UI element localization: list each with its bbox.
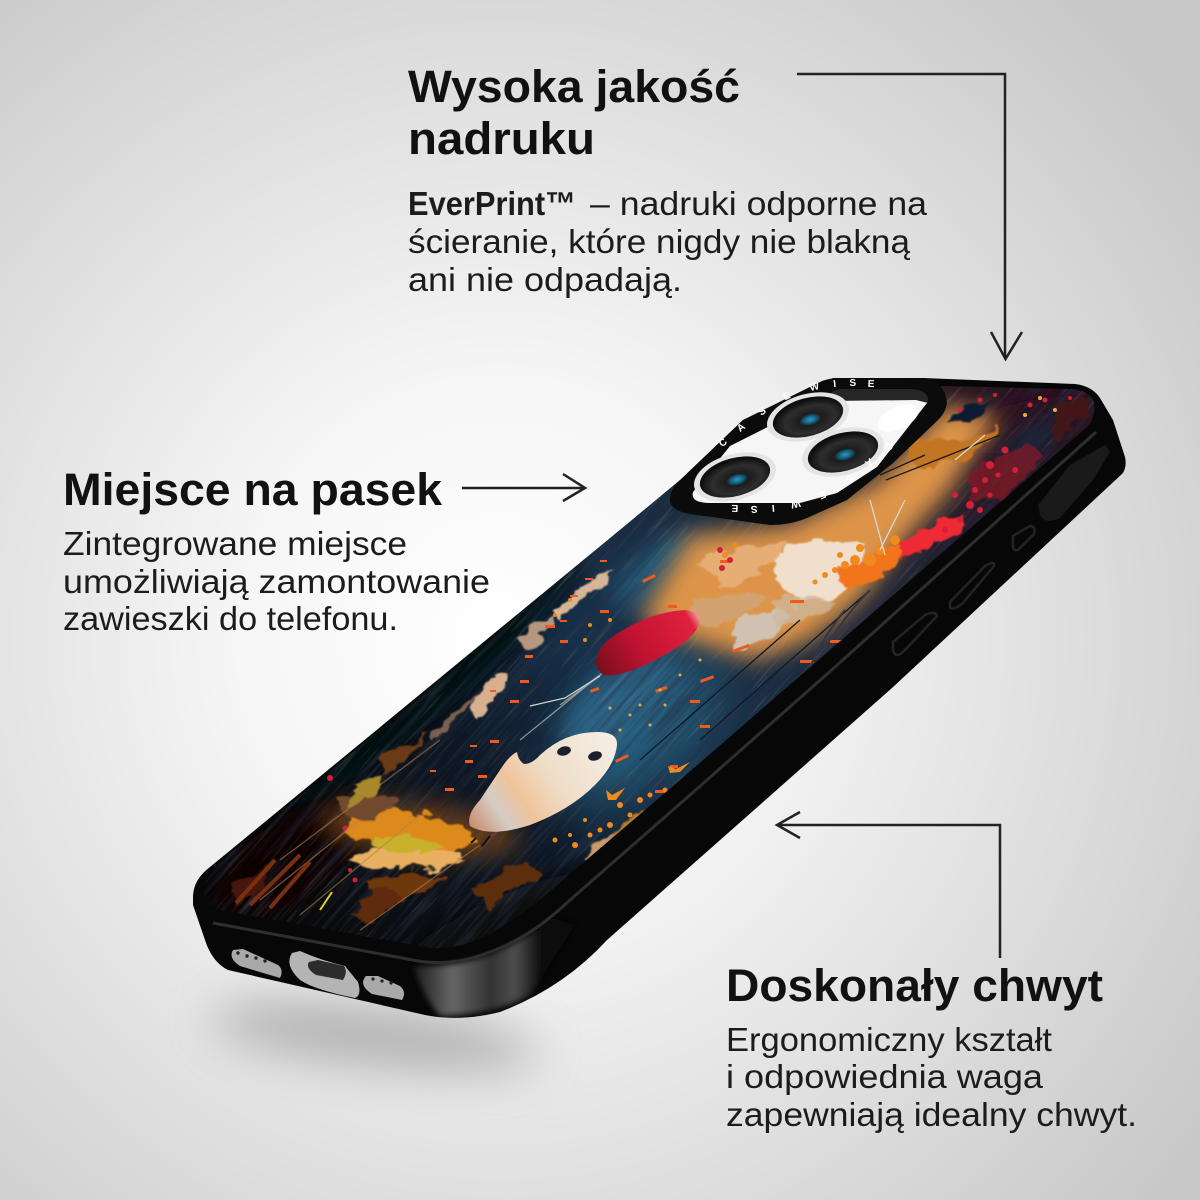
body text: EverPrint™ — [408, 185, 576, 222]
artwork brush strokes — [226, 400, 1085, 925]
bezel logo text: I — [771, 502, 775, 513]
button: action — [1013, 526, 1034, 550]
arrow — [777, 812, 1000, 958]
painted back artwork — [204, 386, 1094, 948]
body text — [726, 1021, 1137, 1133]
lens middle — [796, 419, 890, 485]
body text: i odpowiednia waga — [726, 1058, 1044, 1095]
ghost — [469, 732, 617, 846]
bezel logo text: W — [809, 381, 821, 394]
plate highlight — [873, 399, 923, 437]
heading: Miejsce na pasek — [63, 464, 443, 515]
camera plate — [693, 390, 927, 503]
artwork paint splatter — [430, 560, 842, 793]
charging port — [289, 951, 359, 998]
body text: zawieszki do telefonu. — [63, 600, 398, 637]
bezel logo text: S — [757, 405, 769, 418]
body text: ani nie odpadają. — [408, 261, 682, 298]
heading: Doskonały chwyt — [726, 960, 1103, 1011]
callout: perfect grip — [726, 812, 1137, 1133]
side rim highlight — [213, 432, 1096, 963]
bezel logo text: S — [843, 472, 855, 485]
phone shadow — [208, 989, 542, 1083]
bezel logo text: S — [849, 378, 857, 389]
callout: print quality — [408, 61, 1022, 359]
bezel logo text: W — [789, 497, 801, 510]
balloon — [530, 610, 700, 706]
body text — [408, 185, 928, 298]
bezel logo text: E — [782, 390, 793, 403]
speaker grille left — [232, 949, 282, 978]
bezel logo text: A — [862, 455, 875, 469]
speaker grille right — [363, 976, 404, 1000]
strap slot — [1038, 445, 1110, 521]
body text: umożliwiają zamontowanie — [63, 563, 490, 600]
body text: – nadruki odporne na — [590, 185, 928, 222]
side buttons — [893, 526, 1034, 655]
artwork directional streak texture — [204, 386, 1094, 948]
bezel logo text: I — [833, 379, 837, 390]
lens bottom — [688, 444, 782, 510]
bezel logo text: S — [750, 503, 758, 514]
phone in case — [193, 378, 1126, 1018]
bezel logo text: A — [735, 421, 748, 435]
camera bezel — [670, 378, 947, 525]
body text: Zintegrowane miejsce — [63, 525, 407, 562]
heading: nadruku — [408, 113, 595, 164]
bezel logo text — [717, 378, 895, 514]
body text — [63, 525, 490, 637]
body text: zapewniają idealny chwyt. — [726, 1096, 1137, 1133]
body text: Ergonomiczny kształt — [726, 1021, 1052, 1058]
arrow — [462, 474, 585, 501]
bezel logo text: C — [717, 437, 730, 450]
case corner gloss — [414, 930, 541, 1018]
bezel logo text: C — [882, 439, 895, 452]
heading: Wysoka jakość — [408, 61, 740, 112]
lens top — [761, 384, 855, 450]
camera island — [670, 378, 947, 525]
camera plate bevel — [826, 389, 928, 403]
bezel logo text: E — [868, 379, 875, 390]
heading — [408, 61, 740, 164]
button: volume down — [893, 613, 937, 655]
case body — [193, 378, 1126, 1018]
bezel logo text: E — [731, 502, 738, 513]
artwork orange glow — [640, 405, 1000, 660]
callout: strap slot — [63, 464, 585, 637]
arrow — [797, 74, 1022, 359]
ghost eyes — [557, 746, 602, 761]
artwork soft colour fields — [193, 386, 1108, 995]
artwork streaks — [236, 435, 1000, 930]
bezel logo text: E — [816, 488, 827, 501]
button: volume up — [950, 563, 994, 609]
body text: ścieranie, które nigdy nie blakną — [408, 223, 911, 260]
